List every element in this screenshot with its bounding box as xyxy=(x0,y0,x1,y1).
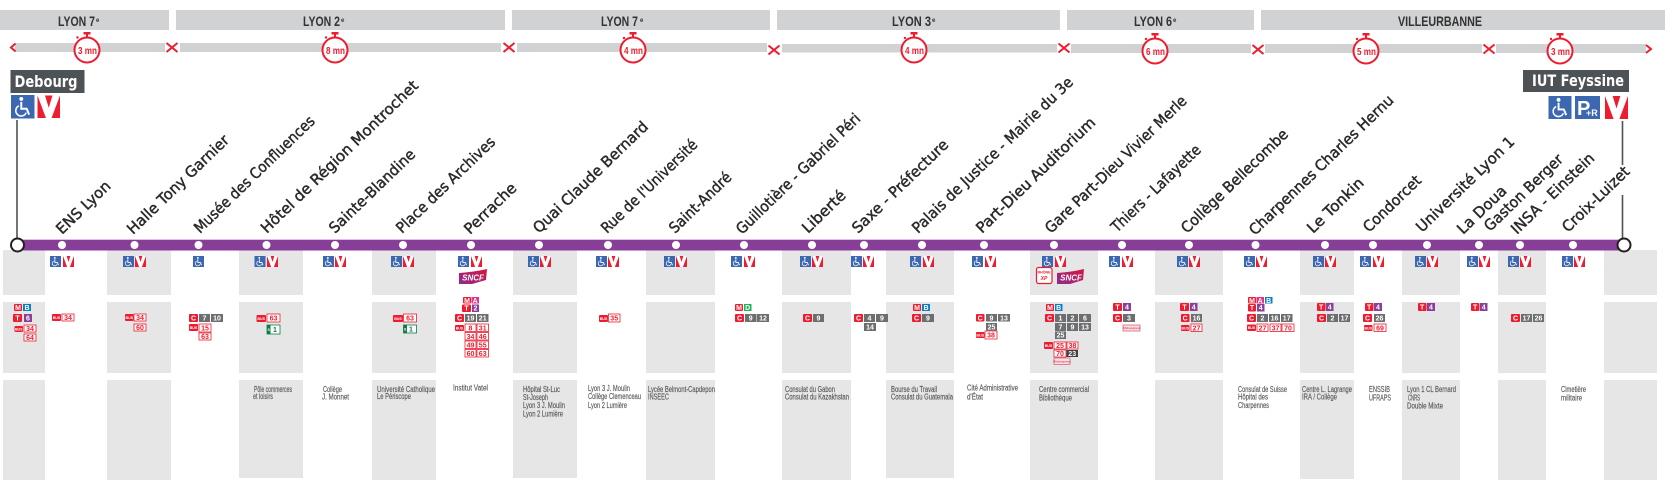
places: Saint-André xyxy=(648,385,715,402)
transit: Condorcet xyxy=(1363,303,1386,332)
transit: Condorcet: C xyxy=(1365,316,1370,322)
places: Sainte-Blandine: Collège xyxy=(323,385,342,394)
transit: Perrache: A xyxy=(473,298,478,305)
station names: Le Tonkin xyxy=(1303,174,1368,237)
transit: Le Tonkin: T xyxy=(1319,304,1324,312)
station names: Gaston Berger xyxy=(1480,150,1567,235)
transit: Guillotière: M xyxy=(736,305,742,312)
places: Le Tonkin xyxy=(1302,385,1352,402)
timer: 4 mn xyxy=(620,32,646,62)
transit: Thiers - Lafayette xyxy=(1113,303,1141,331)
places: Rue de l'Université: Lyon 2 Lumière xyxy=(588,401,627,410)
places: Quai Claude Bernard: Lyon 2 Lumière xyxy=(523,410,563,418)
travel time bars xyxy=(15,43,1646,53)
station names: La Doua xyxy=(1453,182,1510,238)
places: Sainte-Blandine: J. Monnet xyxy=(322,392,350,402)
places: Croix-Luizet: militaire xyxy=(1561,394,1582,402)
station names: Rue de l'Université xyxy=(597,136,701,237)
transit: Saxe - Préfecture xyxy=(854,314,888,332)
transit: La Doua xyxy=(1471,303,1488,312)
transit: Charpennes Charles Hernu: B xyxy=(1266,298,1271,305)
transit: Palais de Justice: M xyxy=(914,305,920,312)
transit: Le Tonkin: 17 xyxy=(1341,316,1348,322)
timer: 3 mn Villeurbanne: 3 mn xyxy=(1551,46,1570,58)
transit: Hôtel de Région Montrochet xyxy=(256,314,280,334)
transit: Collège Bellecombe: C xyxy=(1183,316,1188,322)
accessibility icons row xyxy=(50,256,1585,267)
transit: Perrache: 55 xyxy=(479,342,487,349)
transit: Guillotière: C xyxy=(737,316,742,322)
panel: information columns background xyxy=(3,250,1657,480)
transit: Condorcet: 26 xyxy=(1376,316,1383,322)
transit: Palais de Justice: 9 xyxy=(926,316,930,322)
transit: Collège Bellecombe: 16 xyxy=(1193,316,1200,322)
logo: Rhônexpress Gare Part-Dieu xyxy=(1036,268,1052,284)
places: Rue de l'Université: Collège Clemenceau xyxy=(588,392,641,401)
places: Palais de Justice xyxy=(891,385,953,402)
transit: Debourg xyxy=(13,304,36,342)
places: Charpennes xyxy=(1238,385,1287,410)
transit: Gare Part-Dieu Vivier Merle: BUS xyxy=(1045,344,1053,348)
transit: Debourg: T xyxy=(15,316,20,322)
transit: Halle Tony Garnier xyxy=(125,314,146,332)
transit: Le Tonkin xyxy=(1317,303,1350,322)
transit: Musée des Confluences: 7 xyxy=(203,316,207,322)
district: Lyon 3e: e xyxy=(932,18,936,24)
station names: Collège Bellecombe xyxy=(1177,125,1292,237)
transit: Condorcet: 4 xyxy=(1376,304,1380,312)
icons: Debourg services xyxy=(11,95,60,118)
district: Villeurbanne: VILLEURBANNE xyxy=(1398,13,1482,29)
transit: Charpennes Charles Hernu: T xyxy=(1250,305,1255,312)
transit: Place des Archives: BUS xyxy=(394,317,402,321)
district: Villeurbanne xyxy=(1261,10,1665,30)
station names: Charpennes Charles Hernu xyxy=(1245,91,1397,239)
logo: SNCF Gare Part-Dieu xyxy=(1057,269,1084,284)
station names: Palais de Justice - Mairie du 3e xyxy=(908,73,1077,237)
transit: Liberté: C xyxy=(805,316,810,322)
transit: Halle Tony Garnier: BUS xyxy=(126,316,134,320)
district: Lyon 7e: e xyxy=(96,18,100,24)
transit: Liberté: 9 xyxy=(817,316,821,322)
transit: Musée des Confluences xyxy=(189,314,223,341)
timer: 4 mn Lyon 3 xyxy=(902,32,926,62)
transit: Perrache: 34 xyxy=(467,334,474,341)
transit: Saxe - Préfecture: 9 xyxy=(880,316,884,322)
district: Lyon 3e xyxy=(777,10,1060,30)
transit: Gare Part-Dieu Vivier Merle: 70 xyxy=(1056,351,1064,358)
places: Hôtel de Région Montrochet xyxy=(253,385,292,401)
transit: Perrache: 46 xyxy=(479,334,487,341)
transit: Part-Dieu Auditorium xyxy=(976,314,1010,340)
timer: 3 mn: 3 mn xyxy=(78,45,97,57)
transit: Debourg: 6 xyxy=(26,316,30,322)
transit: Perrache: 31 xyxy=(479,325,487,332)
transit: Debourg: 34 xyxy=(26,326,34,333)
transit: Guillotière: 9 xyxy=(749,316,753,322)
places: Palais de Justice: Bourse du Travail xyxy=(891,385,937,394)
transit: INSA - Einstein: 26 xyxy=(1535,316,1542,322)
transit: Place des Archives: S xyxy=(404,328,407,332)
places: Palais de Justice: Consulat du Guatemala xyxy=(891,392,953,402)
places: Condorcet: UFRAPS xyxy=(1369,394,1391,402)
station names: Liberté xyxy=(798,186,850,237)
transit: Perrache: T xyxy=(464,306,469,313)
places: Université Lyon 1: CNRS xyxy=(1408,394,1420,402)
transit: Charpennes Charles Hernu: 2 xyxy=(1261,316,1265,322)
transit: Thiers - Lafayette: C xyxy=(1115,316,1120,322)
transit: Gare Part-Dieu Vivier Merle: 9 xyxy=(1071,324,1075,332)
places: Charpennes: Hôpital des xyxy=(1238,392,1268,402)
places: Charpennes: Consulat de Suisse xyxy=(1238,385,1287,394)
places: Le Tonkin: Centre L. Lagrange xyxy=(1302,385,1352,394)
station names: Guillotière - Gabriel Péri xyxy=(732,110,864,238)
timer: 6 mn: 6 mn xyxy=(1146,46,1165,58)
transit: Perrache: 63 xyxy=(479,351,487,358)
places: Saint-André: Lycée Belmont-Capdepon xyxy=(648,385,715,394)
district: Lyon 6e: LYON 6 xyxy=(1134,13,1172,29)
transit: Charpennes Charles Hernu: 4 xyxy=(1259,305,1263,312)
transit: Perrache: 8 xyxy=(469,325,473,332)
station names: Saxe - Préfecture xyxy=(848,136,952,237)
station names: Université Lyon 1 xyxy=(1412,133,1518,236)
transit: Musée des Confluences: 63 xyxy=(201,334,209,341)
transit: Université Lyon 1: 4 xyxy=(1429,304,1433,312)
logo: Rhônexpress Gare Part-Dieu: RHÔNE xyxy=(1038,270,1051,274)
transit: Gare Part-Dieu Vivier Merle: Rhônexpress xyxy=(1053,360,1071,364)
places: Croix-Luizet: Cimetière xyxy=(1561,385,1586,394)
logo: SNCF Perrache: SNCF xyxy=(462,274,485,282)
station names: Sainte-Blandine xyxy=(325,145,419,237)
places: Rue de l'Université xyxy=(588,384,641,410)
transit: Gare Part-Dieu Vivier Merle: B xyxy=(1056,305,1061,312)
places: Part-Dieu Auditorium: Cité Administrative xyxy=(967,384,1018,392)
places: Croix-Luizet xyxy=(1561,385,1586,402)
district: Lyon 2e xyxy=(176,10,505,30)
places: Condorcet: ENSSIB xyxy=(1369,385,1390,394)
icons: IUT Feyssine services: +R xyxy=(1586,108,1598,118)
station names: Place des Archives xyxy=(392,133,499,237)
transit: ENS Lyon: BUS xyxy=(53,316,61,320)
transit: Perrache: 2 xyxy=(474,306,478,313)
station names: Part-Dieu Auditorium xyxy=(972,113,1099,237)
transit: Thiers - Lafayette: 4 xyxy=(1125,304,1129,312)
station names: Thiers - Lafayette xyxy=(1107,141,1205,236)
transit: Le Tonkin: 2 xyxy=(1331,316,1335,322)
transit: Condorcet: T xyxy=(1367,304,1372,312)
places: Quai Claude Bernard: Lyon 3 J. Moulin xyxy=(523,401,565,410)
transit: Part-Dieu Auditorium: 13 xyxy=(1000,315,1008,322)
transit: Rue de l'Université: 35 xyxy=(610,316,618,322)
places: Hôtel de Région Montrochet: et loisirs xyxy=(253,392,273,401)
places: Université Lyon 1 xyxy=(1407,385,1456,410)
transit: Place des Archives xyxy=(393,314,416,334)
transit: Collège Bellecombe: 27 xyxy=(1193,325,1200,332)
places: Place des Archives xyxy=(377,385,435,401)
transit: Part-Dieu Auditorium: 9 xyxy=(990,315,994,322)
icons: IUT Feyssine services xyxy=(1548,96,1628,120)
station names xyxy=(52,73,1633,239)
transit: Saxe - Préfecture: 4 xyxy=(868,316,872,322)
station names: INSA - Einstein xyxy=(1507,149,1598,238)
transit: Guillotière xyxy=(735,304,769,322)
station names: Hôtel de Région Montrochet xyxy=(257,77,422,237)
places: Quai Claude Bernard xyxy=(523,385,565,418)
transit: ENS Lyon: 34 xyxy=(64,315,72,322)
district: Lyon 3e: LYON 3 xyxy=(892,13,931,29)
transit: Guillotière: 12 xyxy=(759,316,767,322)
station names: Saint-André xyxy=(665,168,735,237)
transit: Musée des Confluences: C xyxy=(191,316,196,322)
transit: Gare Part-Dieu Vivier Merle xyxy=(1044,304,1091,364)
transit: ENS Lyon xyxy=(52,314,74,322)
transit: Palais de Justice: B xyxy=(923,305,929,312)
transit: Thiers - Lafayette: 3 xyxy=(1127,316,1131,322)
transit: Charpennes Charles Hernu: A xyxy=(1258,298,1263,305)
places: Quai Claude Bernard: Hôpital St-Luc xyxy=(523,385,560,394)
terminus label: IUT Feyssine xyxy=(1523,70,1629,92)
station names: Gare Part-Dieu Vivier Merle xyxy=(1041,92,1190,237)
transit: Palais de Justice: C xyxy=(914,316,919,322)
transit: Debourg: M xyxy=(15,305,21,312)
transit: Gare Part-Dieu Vivier Merle: C xyxy=(1047,316,1052,322)
transit: Gare Part-Dieu Vivier Merle: 6 xyxy=(1083,316,1087,322)
transit: Gare Part-Dieu Vivier Merle: 13 xyxy=(1081,324,1089,332)
transit: Gare Part-Dieu Vivier Merle: 7 xyxy=(1059,324,1063,332)
district: Lyon 6e: e xyxy=(1173,18,1177,24)
places: Quai Claude Bernard: St-Joseph xyxy=(523,393,548,402)
transit: Gare Part-Dieu Vivier Merle: 2 xyxy=(1071,316,1075,322)
logo: Rhônexpress Gare Part-Dieu: XP xyxy=(1040,276,1048,282)
transit: Debourg: BUS xyxy=(15,327,23,331)
timer: 6 mn xyxy=(1142,33,1168,64)
transit: Gare Part-Dieu Vivier Merle: 1 xyxy=(1059,316,1063,322)
transit: Saxe - Préfecture: C xyxy=(856,316,861,322)
metro line C3 stripe with stops xyxy=(11,238,1630,252)
transit: INSA - Einstein: C xyxy=(1513,316,1518,322)
transit: Charpennes Charles Hernu: C xyxy=(1249,316,1254,322)
transit: Le Tonkin: 4 xyxy=(1328,304,1332,312)
transit: Halle Tony Garnier: 34 xyxy=(136,315,144,322)
transit: Hôtel de Région Montrochet: BUS xyxy=(257,317,266,321)
places: Université Lyon 1: Lyon 1 CL Bernard xyxy=(1407,385,1456,394)
transit: Collège Bellecombe: BUS xyxy=(1181,326,1190,330)
places: Place des Archives: Université Catholique xyxy=(377,385,435,394)
terminus label: Debourg: Debourg xyxy=(14,72,78,91)
transit: Rue de l'Université xyxy=(599,314,620,322)
timer: 4 mn: 4 mn xyxy=(624,45,643,57)
transit: La Doua: 4 xyxy=(1482,304,1486,312)
station names: Croix-Luizet xyxy=(1558,162,1633,236)
transit: Part-Dieu Auditorium: 25 xyxy=(988,324,995,331)
transit: Condorcet: 69 xyxy=(1376,325,1384,332)
places: Rue de l'Université: Lyon 3 J. Moulin xyxy=(588,384,630,393)
district bars xyxy=(0,10,1665,30)
station names: Musée des Confluences xyxy=(190,112,319,237)
places: Liberté xyxy=(785,385,849,402)
transit: Musée des Confluences: 15 xyxy=(201,326,209,332)
transit: Le Tonkin: C xyxy=(1319,316,1324,322)
station names: Perrache xyxy=(460,179,520,238)
transit: Perrache: 49 xyxy=(467,342,474,349)
transit: INSA - Einstein xyxy=(1511,314,1544,322)
transit: Palais de Justice xyxy=(912,304,934,322)
transit: Musée des Confluences: BUS xyxy=(190,326,198,330)
transit: Part-Dieu Auditorium: C xyxy=(978,315,983,322)
transit: Place des Archives: 63 xyxy=(406,316,414,322)
transit: Hôtel de Région Montrochet: 63 xyxy=(270,316,277,322)
places: Gare Part-Dieu: Centre commercial xyxy=(1039,385,1089,394)
transit: Charpennes Charles Hernu: M xyxy=(1249,298,1255,305)
district: Lyon 7e xyxy=(0,10,169,30)
transit: Perrache: C xyxy=(457,316,462,322)
transit: Saxe - Préfecture: 14 xyxy=(866,324,874,332)
timer: 4 mn Lyon 3: 4 mn xyxy=(905,45,924,57)
transit: Perrache: 21 xyxy=(479,316,487,322)
transit: Perrache: 60 xyxy=(467,351,474,358)
district: Lyon 7e second xyxy=(512,10,770,30)
transit: Thiers - Lafayette: T xyxy=(1115,304,1120,312)
timer: 5 mn: 5 mn xyxy=(1357,46,1376,58)
transit: Charpennes Charles Hernu: 17 xyxy=(1283,316,1291,322)
timer: 8 mn xyxy=(322,32,348,62)
transit: Debourg: 64 xyxy=(26,335,34,342)
transit: Hôtel de Région Montrochet: S xyxy=(267,328,270,332)
transit: Charpennes Charles Hernu: BUS xyxy=(1248,326,1256,330)
transit: Rue de l'Université: BUS xyxy=(600,317,608,321)
transit: Debourg: B xyxy=(24,305,30,312)
transit: Condorcet: BUS xyxy=(1364,326,1373,330)
icons: IUT Feyssine services: P xyxy=(1577,98,1590,120)
station names: Condorcet xyxy=(1359,171,1425,236)
transit: Charpennes Charles Hernu: 16 xyxy=(1271,316,1278,322)
line connector: Debourg xyxy=(16,120,18,240)
places: Gare Part-Dieu: Bibliothèque xyxy=(1039,394,1072,402)
timer: 3 mn Villeurbanne xyxy=(1548,33,1572,64)
transit: Collège Bellecombe xyxy=(1180,303,1202,332)
transit: Université Lyon 1 xyxy=(1418,303,1435,312)
places: Gare Part-Dieu xyxy=(1039,385,1089,402)
transit: Gare Part-Dieu Vivier Merle: 23 xyxy=(1068,351,1076,358)
places: Liberté: Consulat du Gabon xyxy=(785,385,835,394)
transit: Charpennes Charles Hernu xyxy=(1247,297,1294,332)
transit: Charpennes Charles Hernu: 70 xyxy=(1284,325,1292,332)
transit: Guillotière: D xyxy=(745,305,750,312)
district: Lyon 7e: LYON 7 xyxy=(58,13,95,29)
transit: Perrache xyxy=(455,297,488,358)
station names: Quai Claude Bernard xyxy=(529,118,652,237)
places: Liberté: Consulat du Kazakhstan xyxy=(785,392,849,402)
places: Condorcet xyxy=(1369,385,1391,402)
transit: Perrache: BUS xyxy=(456,326,464,330)
transit: Place des Archives: 1 xyxy=(409,326,413,334)
timer: 8 mn: 8 mn xyxy=(326,45,345,57)
places: Part-Dieu Auditorium: d'État xyxy=(967,392,984,402)
district: Lyon 7e second: LYON 7 xyxy=(601,13,638,29)
transit: La Doua: T xyxy=(1473,304,1478,312)
places: Université Lyon 1: Double Mixte xyxy=(1407,402,1443,410)
line connector: IUT Feyssine xyxy=(1622,121,1624,240)
logo: SNCF Perrache xyxy=(459,269,487,284)
transit: Collège Bellecombe: T xyxy=(1182,304,1187,312)
transit: INSA - Einstein: 17 xyxy=(1523,316,1530,322)
section separators and end arrows xyxy=(11,43,1651,54)
transit: Part-Dieu Auditorium: BUS xyxy=(976,333,985,337)
transit: Gare Part-Dieu Vivier Merle: 38 xyxy=(1069,343,1076,350)
transit: Halle Tony Garnier: 60 xyxy=(136,325,144,332)
transit: Part-Dieu Auditorium: 38 xyxy=(987,332,995,340)
terminus label: IUT Feyssine: IUT Feyssine xyxy=(1532,71,1624,90)
timer: 3 mn xyxy=(74,32,100,62)
timer: 5 mn xyxy=(1354,33,1378,64)
district: Lyon 2e: e xyxy=(341,18,345,24)
transit: Charpennes Charles Hernu: 37 xyxy=(1272,325,1279,332)
district: Lyon 2e: LYON 2 xyxy=(303,13,340,29)
places: Saint-André: INSEEC xyxy=(648,392,669,402)
logo: SNCF Gare Part-Dieu: SNCF xyxy=(1060,274,1083,282)
transit: Hôtel de Région Montrochet: 1 xyxy=(273,327,277,334)
transit: Perrache: 19 xyxy=(467,316,474,322)
places: Le Tonkin: IRA / Collège xyxy=(1302,392,1337,402)
transit: Charpennes Charles Hernu: 27 xyxy=(1259,325,1266,332)
transit: Gare Part-Dieu Vivier Merle: 25 xyxy=(1056,343,1064,350)
transit: Musée des Confluences: 10 xyxy=(213,316,221,322)
places: Sainte-Blandine xyxy=(322,385,350,402)
transit: Gare Part-Dieu Vivier Merle: 25 xyxy=(1057,333,1064,340)
places: Part-Dieu Auditorium xyxy=(967,384,1018,402)
transit: Collège Bellecombe: 4 xyxy=(1192,304,1196,312)
places: Place des Archives: Le Périscope xyxy=(377,392,411,401)
station names: ENS Lyon xyxy=(52,177,114,238)
places: Hôtel de Région Montrochet: Pôle commerces xyxy=(254,385,292,394)
district: Lyon 6e xyxy=(1067,10,1254,30)
transit: Université Lyon 1: T xyxy=(1420,304,1425,312)
places: Perrache: Institut Vatel xyxy=(453,384,488,392)
transit: Perrache: M xyxy=(464,298,470,305)
district: Lyon 7e second: e xyxy=(640,18,644,24)
transit: Gare Part-Dieu Vivier Merle: M xyxy=(1047,305,1053,312)
transit: Liberté xyxy=(803,314,824,322)
station names: Halle Tony Garnier xyxy=(123,131,233,238)
transit: Thiers - Lafayette: Rhônexpress xyxy=(1123,326,1141,330)
places: Charpennes: Charpennes xyxy=(1238,401,1269,410)
